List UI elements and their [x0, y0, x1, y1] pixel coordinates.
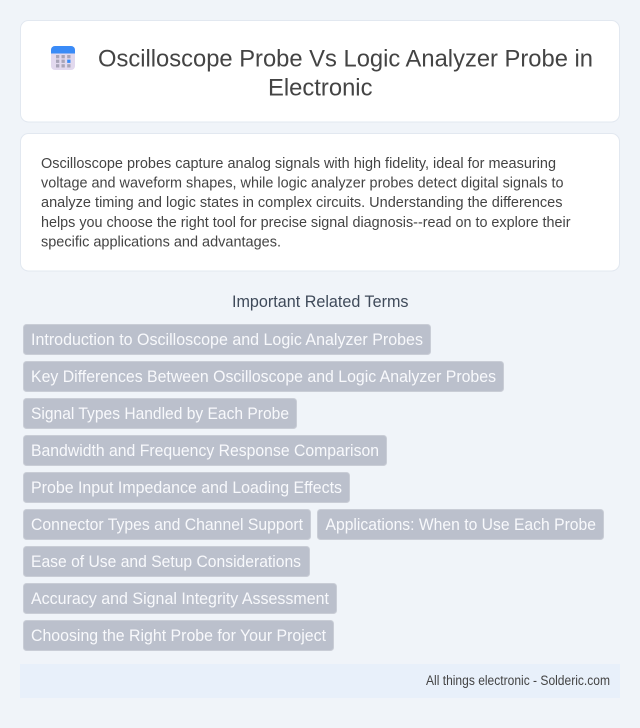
- tag: accuracy: [24, 584, 336, 614]
- tag: bandwidth: [24, 436, 386, 466]
- tag: applications: Applications: When to Use Each Probe: [326, 516, 596, 534]
- title: Electronic: [268, 74, 372, 102]
- tag: accuracy: Accuracy and Signal Integrity Assessment: [31, 590, 329, 608]
- title: [98, 46, 593, 102]
- footer credit: All things electronic - Solderic.com: [426, 673, 610, 688]
- intro text block: Oscilloscope probes capture analog signals with high fidelity, ideal for measuring: [41, 155, 556, 172]
- header panel: [20, 20, 620, 122]
- tag: key differences: [24, 362, 504, 392]
- intro text block: [41, 155, 570, 250]
- icon: calendar grid: [51, 46, 75, 70]
- tag: choosing probe: [24, 620, 334, 650]
- related terms tags: [24, 324, 604, 650]
- intro text block: analyze timing and logic states in complex circuits. Understanding the differences: [41, 194, 562, 211]
- tag: signal types: [24, 398, 296, 428]
- tag: introduction: Introduction to Oscilloscope and Logic Analyzer Probes: [31, 331, 423, 349]
- tag: key differences: Key Differences Between Oscilloscope and Logic Analyzer Probes: [31, 368, 496, 386]
- tag: connector types: Connector Types and Channel Support: [31, 516, 303, 534]
- intro text block: specific applications and advantages.: [41, 233, 281, 250]
- tag: introduction: [24, 324, 430, 354]
- tag: connector types: [24, 510, 310, 540]
- tag: ease of use: [24, 546, 310, 576]
- tag: applications: [318, 510, 604, 540]
- title: Oscilloscope Probe Vs Logic Analyzer Probe in: [98, 46, 593, 72]
- tag: input impedance: [24, 472, 350, 502]
- intro panel: [20, 134, 620, 271]
- heading: important related terms: Important Related Terms: [232, 293, 408, 311]
- footer bar: [20, 664, 620, 698]
- intro text block: helps you choose the right tool for precise signal diagnosis--read on to explore their: [41, 214, 570, 231]
- intro text block: voltage and waveform shapes, while logic analyzer probes detect digital signals to: [41, 175, 564, 192]
- tag: input impedance: Probe Input Impedance and Loading Effects: [31, 479, 342, 497]
- tag: choosing probe: Choosing the Right Probe for Your Project: [31, 627, 326, 645]
- tag: bandwidth: Bandwidth and Frequency Response Comparison: [31, 442, 379, 460]
- tag: ease of use: Ease of Use and Setup Considerations: [31, 553, 301, 571]
- tag: signal types: Signal Types Handled by Each Probe: [31, 405, 289, 423]
